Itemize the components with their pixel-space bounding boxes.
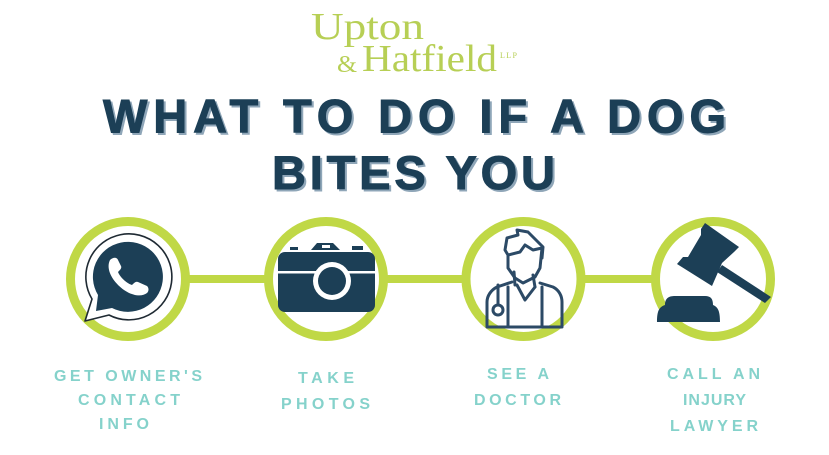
logo: Upton & Hatfield LLP: &	[337, 52, 357, 78]
label: call an injury lawyer: CALL AN	[667, 366, 760, 383]
label: take photos: TAKE	[298, 370, 354, 387]
label: get owner's contact info: INFO	[99, 416, 149, 433]
label: call an injury lawyer: LAWYER	[670, 418, 758, 435]
step 3 circle: see a doctor	[466, 222, 581, 336]
connector lines	[186, 275, 655, 283]
icon: gavel	[657, 223, 771, 322]
step 2 circle: take photos	[268, 222, 384, 336]
logo: Upton & Hatfield LLP: LLP	[500, 51, 518, 60]
icon: camera	[278, 243, 375, 312]
title: WHAT TO DO IF A DOG	[103, 90, 726, 142]
logo: Upton & Hatfield LLP	[311, 6, 518, 80]
step 4 circle: call an injury lawyer	[656, 222, 771, 336]
title: WHAT TO DO IF A DOG	[105, 92, 728, 144]
label: get owner's contact info: CONTACT	[78, 392, 180, 409]
label: see a doctor: SEE A	[487, 366, 549, 383]
logo: Upton & Hatfield LLP: Upton	[311, 6, 424, 48]
title: BITES YOU	[274, 148, 557, 201]
label: take photos: PHOTOS	[281, 396, 370, 413]
logo: Upton & Hatfield LLP: Hatfield	[362, 38, 497, 80]
title: BITES YOU	[272, 146, 555, 199]
icon: doctor with stethoscope	[487, 230, 562, 327]
step 1 circle: get owner's contact info	[70, 222, 186, 336]
title	[103, 90, 728, 201]
label: get owner's contact info: GET OWNER'S	[54, 368, 202, 385]
icon: phone chat bubble	[85, 234, 172, 321]
label: take photos	[281, 370, 370, 413]
label: call an injury lawyer	[667, 366, 760, 435]
label: call an injury lawyer: INJURY	[683, 392, 746, 409]
label: see a doctor	[474, 366, 561, 409]
label: get owner's contact info	[54, 368, 202, 433]
label: see a doctor: DOCTOR	[474, 392, 561, 409]
